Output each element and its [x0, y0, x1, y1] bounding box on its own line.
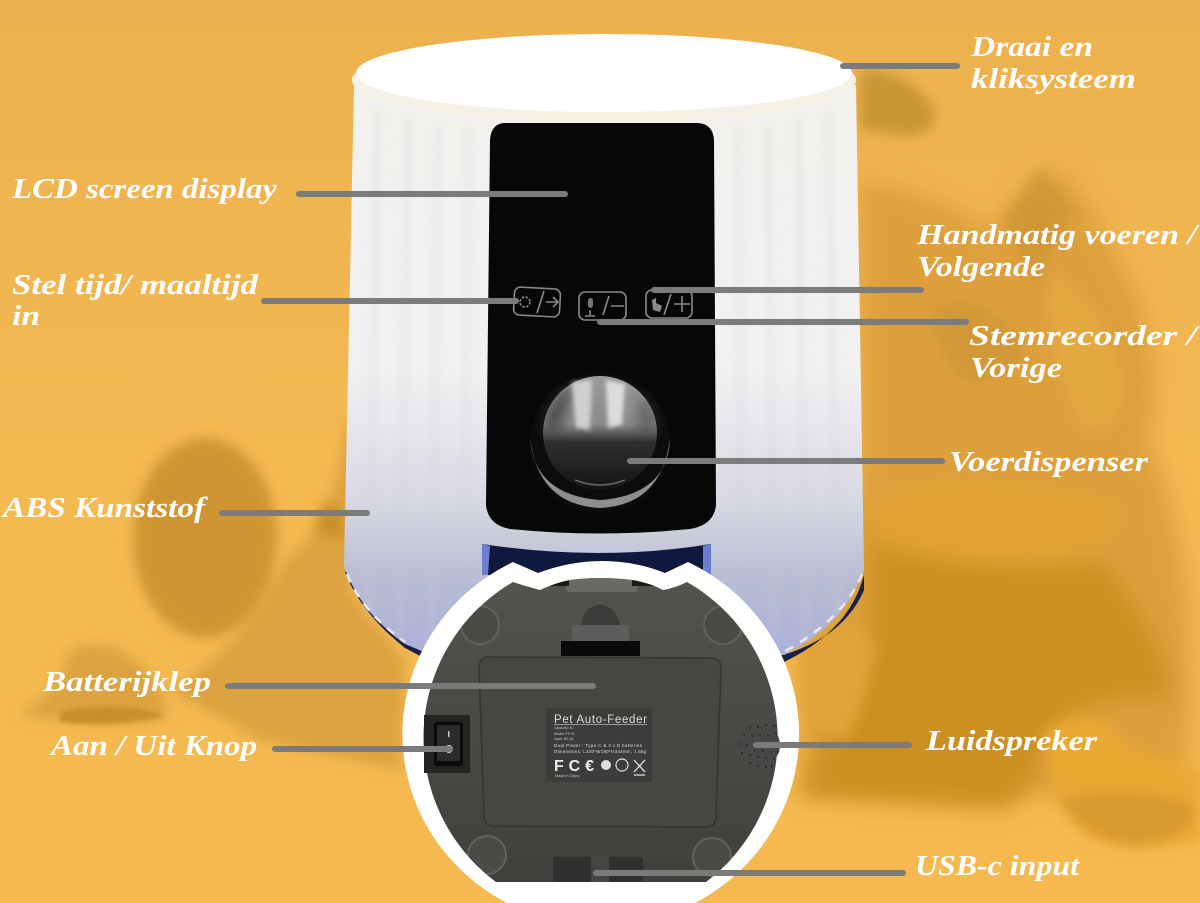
rubber feet — [461, 606, 499, 644]
callout: Stel tijd / maaltijd in: Stel tijd/ maaltijd — [12, 269, 259, 301]
dashed bottom edge — [347, 574, 405, 642]
product label — [546, 708, 652, 782]
callout: Draai en kliksysteem — [843, 31, 1136, 95]
callout: ABS Kunststof: ABS Kunststof — [1, 492, 209, 524]
callout: Handmatig voeren / Volgende: Handmatig voeren / — [916, 219, 1200, 251]
food dispenser bowl — [530, 373, 670, 513]
blurred dog — [800, 70, 1200, 845]
product label: Dimensions: L330*W180*H344mm, 1.6kg — [554, 749, 646, 754]
callout: Handmatig voeren / Volgende — [654, 219, 1200, 290]
navy base rim — [345, 572, 864, 662]
callout: Stel tijd / maaltijd in: in — [12, 300, 40, 332]
body shell — [344, 85, 864, 655]
product label: Model: PF-01 — [554, 732, 575, 736]
dog paw — [1045, 718, 1200, 845]
callout: Draai en kliksysteem: kliksysteem — [971, 63, 1136, 95]
feeder body — [344, 34, 864, 662]
icon: voice recorder button — [579, 292, 626, 320]
product label: Input: 5V 1A — [554, 737, 574, 741]
power switch — [424, 715, 470, 773]
product label: FC€ — [554, 758, 594, 775]
callout: Stemrecorder / Vorige — [600, 320, 1200, 384]
callout: USB-c input: USB-c input — [915, 850, 1080, 882]
callout: Draai en kliksysteem: Draai en — [970, 31, 1093, 63]
callout: Batterijklep: Batterijklep — [42, 666, 211, 698]
speaker grille — [736, 723, 780, 768]
vertical ribs — [369, 110, 838, 640]
callout: Stemrecorder / Vorige: Stemrecorder / — [969, 320, 1200, 352]
white ring — [402, 561, 799, 903]
icon: settings button — [513, 287, 561, 317]
USB port — [553, 857, 643, 882]
icon: manual feed button — [646, 290, 692, 318]
battery cover — [479, 657, 721, 827]
product label: Dual Power : Type-C & 3 x D batteries — [554, 743, 643, 748]
top lid — [352, 37, 856, 123]
latch — [581, 605, 620, 625]
callout: Stel tijd / maaltijd in — [12, 269, 516, 332]
callout: LCD screen display: LCD screen display — [11, 173, 277, 205]
callout: Handmatig voeren / Volgende: Volgende — [917, 251, 1045, 283]
product label: Pet Auto-Feeder — [554, 714, 647, 726]
callout: Luidspreker: Luidspreker — [925, 725, 1098, 757]
blurred cat — [20, 420, 405, 770]
callout: Voerdispenser: Voerdispenser — [949, 446, 1149, 478]
dispenser slot — [482, 544, 711, 575]
inset: feeder underside — [400, 560, 800, 903]
callout: Aan / Uit Knop: Aan / Uit Knop — [49, 730, 257, 762]
dark base plate — [423, 578, 778, 882]
callout: Stemrecorder / Vorige: Vorige — [970, 352, 1062, 384]
product label: Capacity: 4L — [554, 726, 574, 730]
dark front panel — [486, 123, 716, 534]
product label: Made in China — [555, 774, 580, 778]
